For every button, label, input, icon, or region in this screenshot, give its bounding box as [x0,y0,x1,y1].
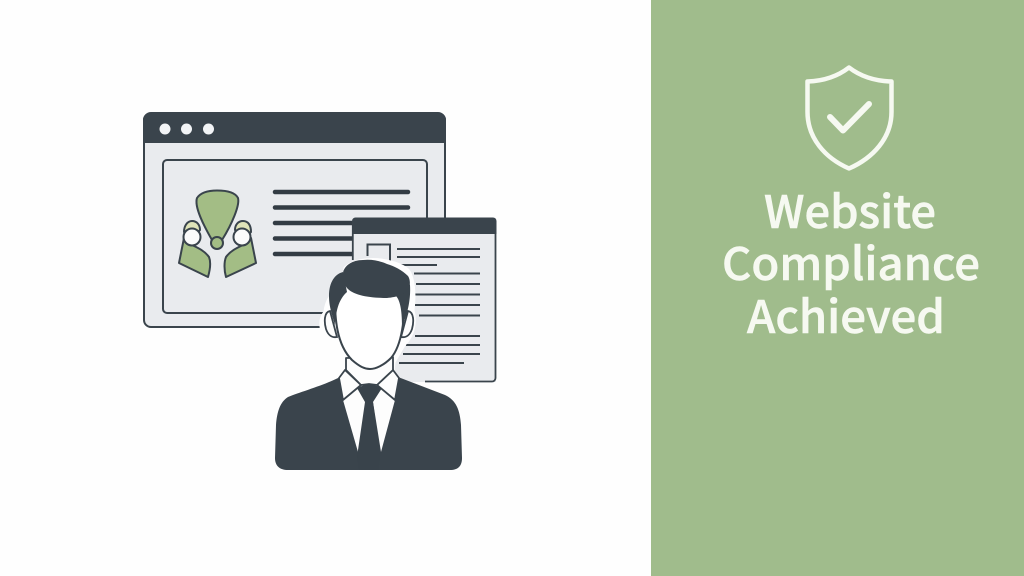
necktie [357,383,382,470]
shirt and collar [340,377,398,452]
face [335,285,405,369]
icon: shield with checkmark [808,68,892,168]
panel: green compliance panel [651,0,1024,576]
title: Website Compliance Achieved: Website [764,176,936,241]
illustration: website windows and person [143,113,496,470]
neck [346,357,393,385]
title: Website Compliance Achieved: Compliance [722,228,980,293]
white area under main window left of suit [320,328,352,382]
ears [325,311,413,337]
front hair [343,260,410,298]
icon: green people emblem [179,190,256,277]
white halo behind person [321,259,414,382]
secondary document window [352,218,496,382]
person in suit [275,259,462,470]
main browser window [143,113,446,327]
title: Website Compliance Achieved: Achieved [747,281,945,346]
suit jacket [275,377,462,470]
back hair [329,272,410,326]
title: Website Compliance Achieved [722,176,980,346]
